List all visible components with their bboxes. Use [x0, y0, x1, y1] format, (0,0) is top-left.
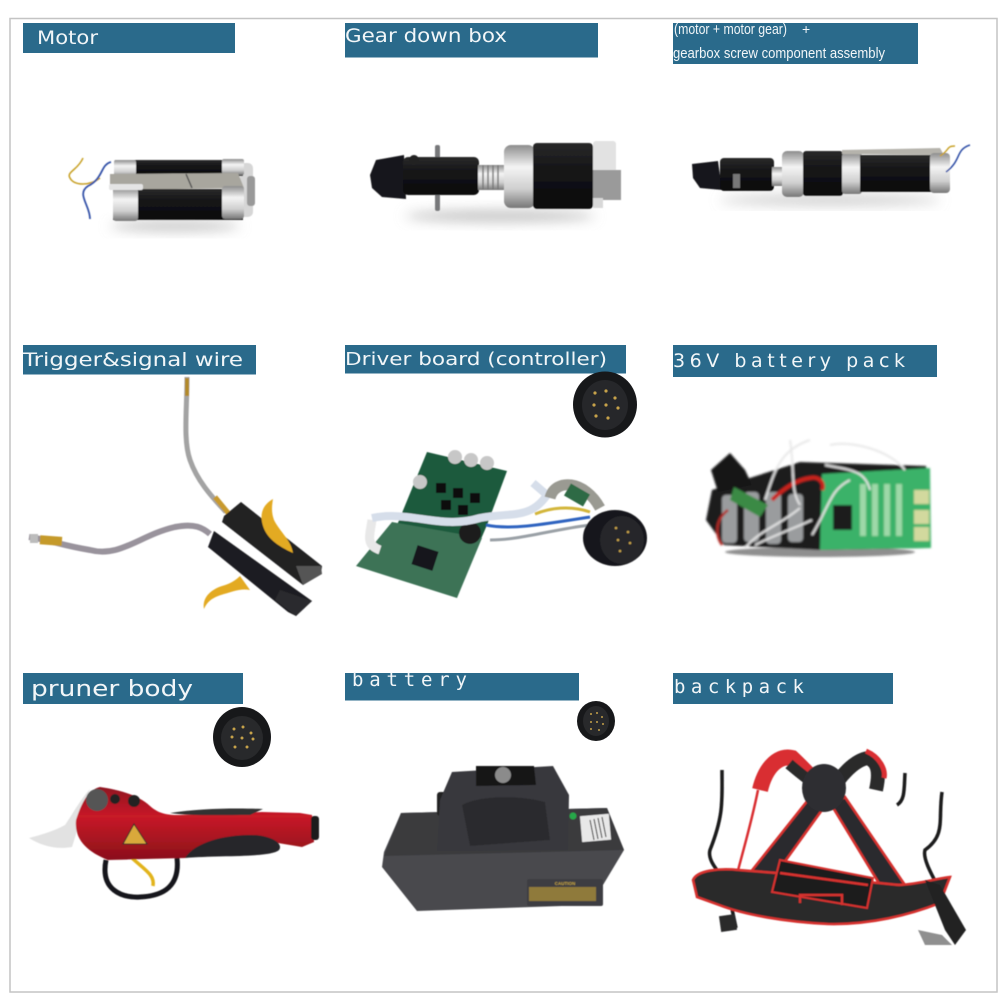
panel: backpack — [673, 673, 966, 945]
panel: driver board — [345, 345, 647, 598]
heading: Motor: Motor — [37, 27, 98, 49]
heading: 36V battery pack — [673, 345, 937, 377]
heading: motor plus gearbox assembly: + — [802, 21, 810, 37]
heading: battery: battery — [352, 669, 467, 691]
icon: round 8-pin connector — [577, 701, 615, 741]
panel: gear down box — [345, 23, 621, 222]
photo: red electric pruner — [29, 787, 319, 897]
heading: motor plus gearbox assembly: (motor + motor gear) — [674, 21, 787, 38]
panel: 36V battery pack — [673, 345, 937, 557]
heading: motor plus gearbox assembly: gearbox screw component assembly — [673, 45, 885, 62]
icon: round 8-pin connector — [213, 707, 271, 767]
caution label: CAUTION — [555, 881, 575, 886]
photo: trigger assemblies with ribbon cables — [29, 377, 322, 616]
photo: driver circuit boards and wiring — [356, 450, 647, 598]
caution label — [527, 879, 603, 906]
panel: assembly — [673, 21, 970, 205]
heading: pruner body — [23, 673, 243, 704]
heading: Trigger&signal wire: Trigger&signal wire — [22, 349, 243, 371]
photo: assembled motor and gearbox — [692, 145, 970, 205]
heading: Gear down box: Gear down box — [345, 25, 507, 47]
photo: harness backpack — [693, 751, 966, 945]
heading: battery — [345, 669, 579, 700]
heading: Trigger&signal wire — [22, 345, 256, 374]
panel: motor — [23, 23, 255, 231]
heading: Driver board (controller): Driver board (controller) — [345, 349, 607, 370]
photo: rectangular battery box — [382, 766, 624, 911]
panel: pruner body — [23, 673, 319, 897]
panel: trigger and signal wire — [22, 345, 322, 616]
heading: motor plus gearbox assembly — [673, 21, 918, 64]
photo: battery cells with protection board — [706, 440, 931, 557]
heading: backpack — [673, 673, 893, 704]
photo: motor — [69, 158, 255, 231]
heading: Motor — [23, 23, 235, 53]
heading: pruner body: pruner body — [31, 677, 193, 702]
heading: Driver board (controller) — [345, 345, 626, 374]
panel: battery — [345, 669, 624, 911]
heading: Gear down box — [345, 23, 598, 58]
heading: 36V battery pack: 36V battery pack — [673, 350, 905, 372]
icon: round 8-pin connector — [573, 372, 637, 438]
heading: backpack: backpack — [674, 676, 805, 698]
photo: gear box — [370, 141, 621, 222]
